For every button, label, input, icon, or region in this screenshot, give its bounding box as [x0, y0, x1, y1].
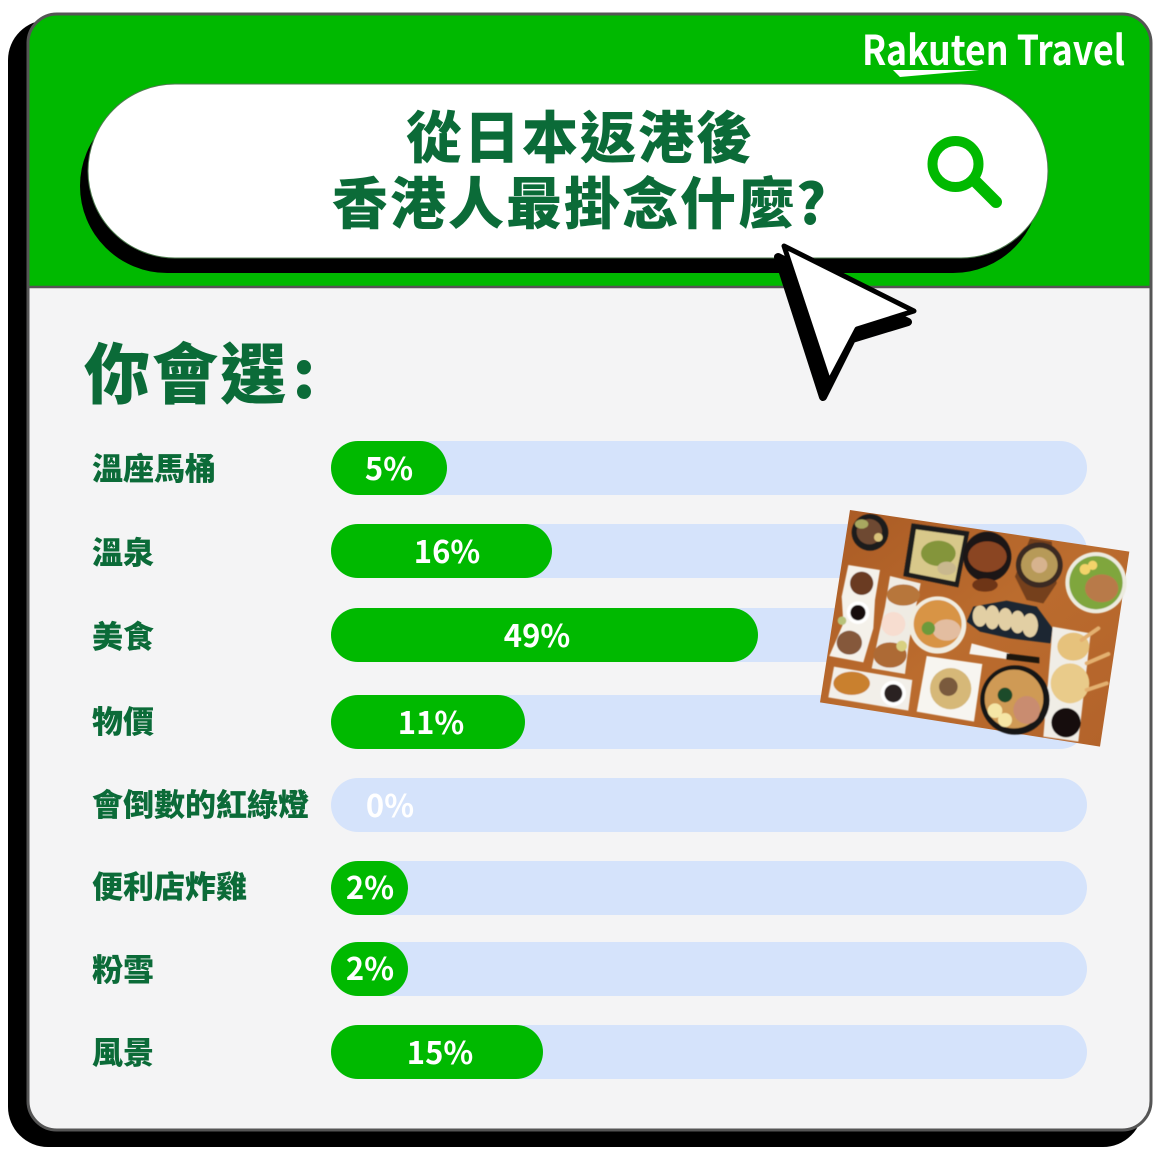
bar row: 美食 [92, 608, 1087, 662]
bar row: 會倒數的紅綠燈: 0% [366, 781, 414, 826]
bar row: 物價: 物價 [92, 697, 154, 742]
bar row: 會倒數的紅綠燈 [92, 778, 1087, 832]
heading: 你會選: 你會選 [84, 322, 288, 418]
bar row: 粉雪: 2% [346, 944, 394, 989]
bar row: 溫座馬桶 [92, 441, 1087, 495]
search bar [80, 84, 1048, 273]
bar row: 溫座馬桶: 溫座馬桶 [92, 444, 216, 489]
bar row: 物價: 11% [398, 698, 464, 743]
icon: cursor arrow [778, 246, 914, 397]
bar row: 風景: 風景 [92, 1028, 154, 1073]
bar row: 便利店炸雞: 便利店炸雞 [92, 862, 247, 907]
bar row: 美食: 美食 [92, 612, 154, 657]
title: 從日本返港後 [406, 94, 754, 175]
logo: Rakuten Travel: Rakuten Travel [862, 17, 1125, 77]
bar row: 粉雪 [92, 942, 1087, 996]
bar row: 便利店炸雞: 2% [346, 863, 394, 908]
title: 香港人最掛念什麼? [332, 160, 828, 241]
bar row: 會倒數的紅綠燈: 會倒數的紅綠燈 [92, 780, 309, 825]
bar row: 物價 [92, 695, 1087, 749]
bar row: 粉雪: 粉雪 [92, 945, 154, 990]
bar row: 風景: 15% [407, 1028, 473, 1073]
bar row: 便利店炸雞 [92, 861, 1087, 915]
bar row: 溫泉: 16% [414, 527, 480, 572]
icon: magnifying glass [932, 141, 996, 202]
bar row: 溫泉: 溫泉 [92, 528, 154, 573]
bar row: 美食: 49% [504, 611, 570, 656]
bar row: 溫座馬桶: 5% [365, 444, 413, 489]
bar row: 風景 [92, 1025, 1087, 1079]
bar row: 溫泉 [92, 524, 1087, 578]
heading: 你會選: : [292, 322, 318, 418]
panel: green header [28, 14, 1151, 287]
title [332, 94, 828, 241]
food photo [820, 510, 1129, 747]
